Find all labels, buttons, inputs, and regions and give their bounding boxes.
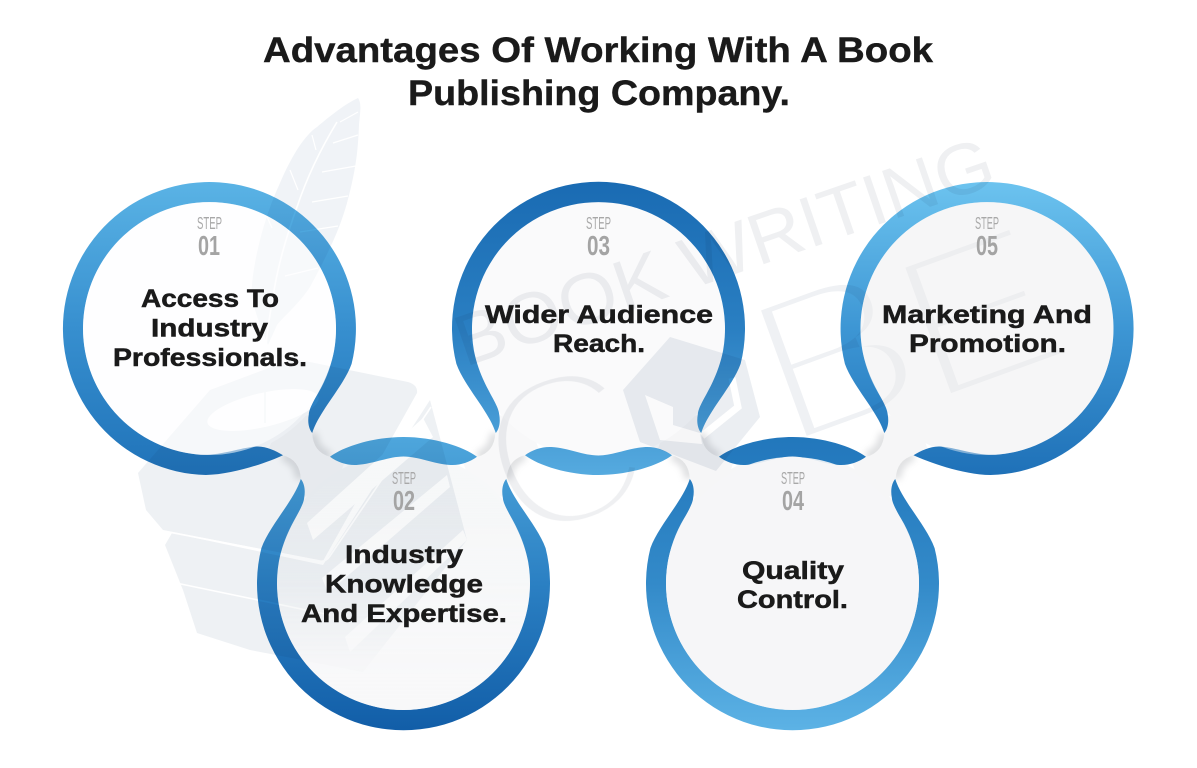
step 05 label: 05 [976,230,998,261]
title [263,31,934,113]
watermark: book writing cube logo [138,98,1092,672]
ring: step 02 [257,437,550,730]
step 02 heading: Knowledge [325,570,483,598]
step 05 heading: Marketing And [882,301,1092,329]
step 04 label: STEP [781,468,805,488]
watermark: letter B: B [719,216,951,492]
watermark: cube mark [623,337,760,471]
neck shadows [283,433,914,479]
step 02 heading: And Expertise. [301,600,507,628]
step 01 heading: Professionals. [113,344,307,372]
step 03 label [586,213,611,261]
circle interiors and connecting necks [80,198,1117,714]
step 03 label: STEP [586,213,611,233]
step 01 label: 01 [198,230,220,261]
step 03 heading: Reach. [553,330,645,358]
step 03 heading [485,301,713,358]
interior veils softening the watermark [83,202,1114,710]
step 01 heading: Industry [151,314,268,342]
step 02 label: 02 [393,485,415,516]
step 02 heading: Industry [345,541,463,569]
step 02 label: STEP [392,468,416,488]
step 04 heading [737,557,848,614]
step 04 heading: Quality [742,557,844,585]
step 03 heading: Wider Audience [485,301,713,329]
step 01 heading [113,285,307,372]
step 01 label: STEP [197,213,222,233]
step 05 heading: Promotion. [909,330,1066,358]
step 01 label [197,213,222,261]
watermark: stacked books and ink bottle [138,360,467,672]
step 05 label: STEP [975,213,999,233]
step 03 label: 03 [587,230,610,261]
ring: step 03 [452,182,745,475]
step 02 label [392,468,416,516]
step 05 heading [882,301,1092,358]
step 02 heading [301,541,507,628]
step 01 heading: Access To [141,285,279,313]
ring: step 01 [63,182,356,475]
step 04 label: 04 [782,485,804,516]
watermark: letter C: C [446,308,679,593]
watermark: feather [252,98,360,372]
watermark: BOOK WRITING text: BOOK WRITING [444,123,1004,382]
ring: step 05 [841,182,1134,475]
title: Publishing Company. [408,74,790,113]
step 04 label [781,468,805,516]
title: Advantages Of Working With A Book [263,31,934,70]
watermark: letter E: E [864,175,1092,449]
step 04 heading: Control. [737,586,848,614]
ring: step 04 [646,437,939,730]
step 05 label [975,213,999,261]
